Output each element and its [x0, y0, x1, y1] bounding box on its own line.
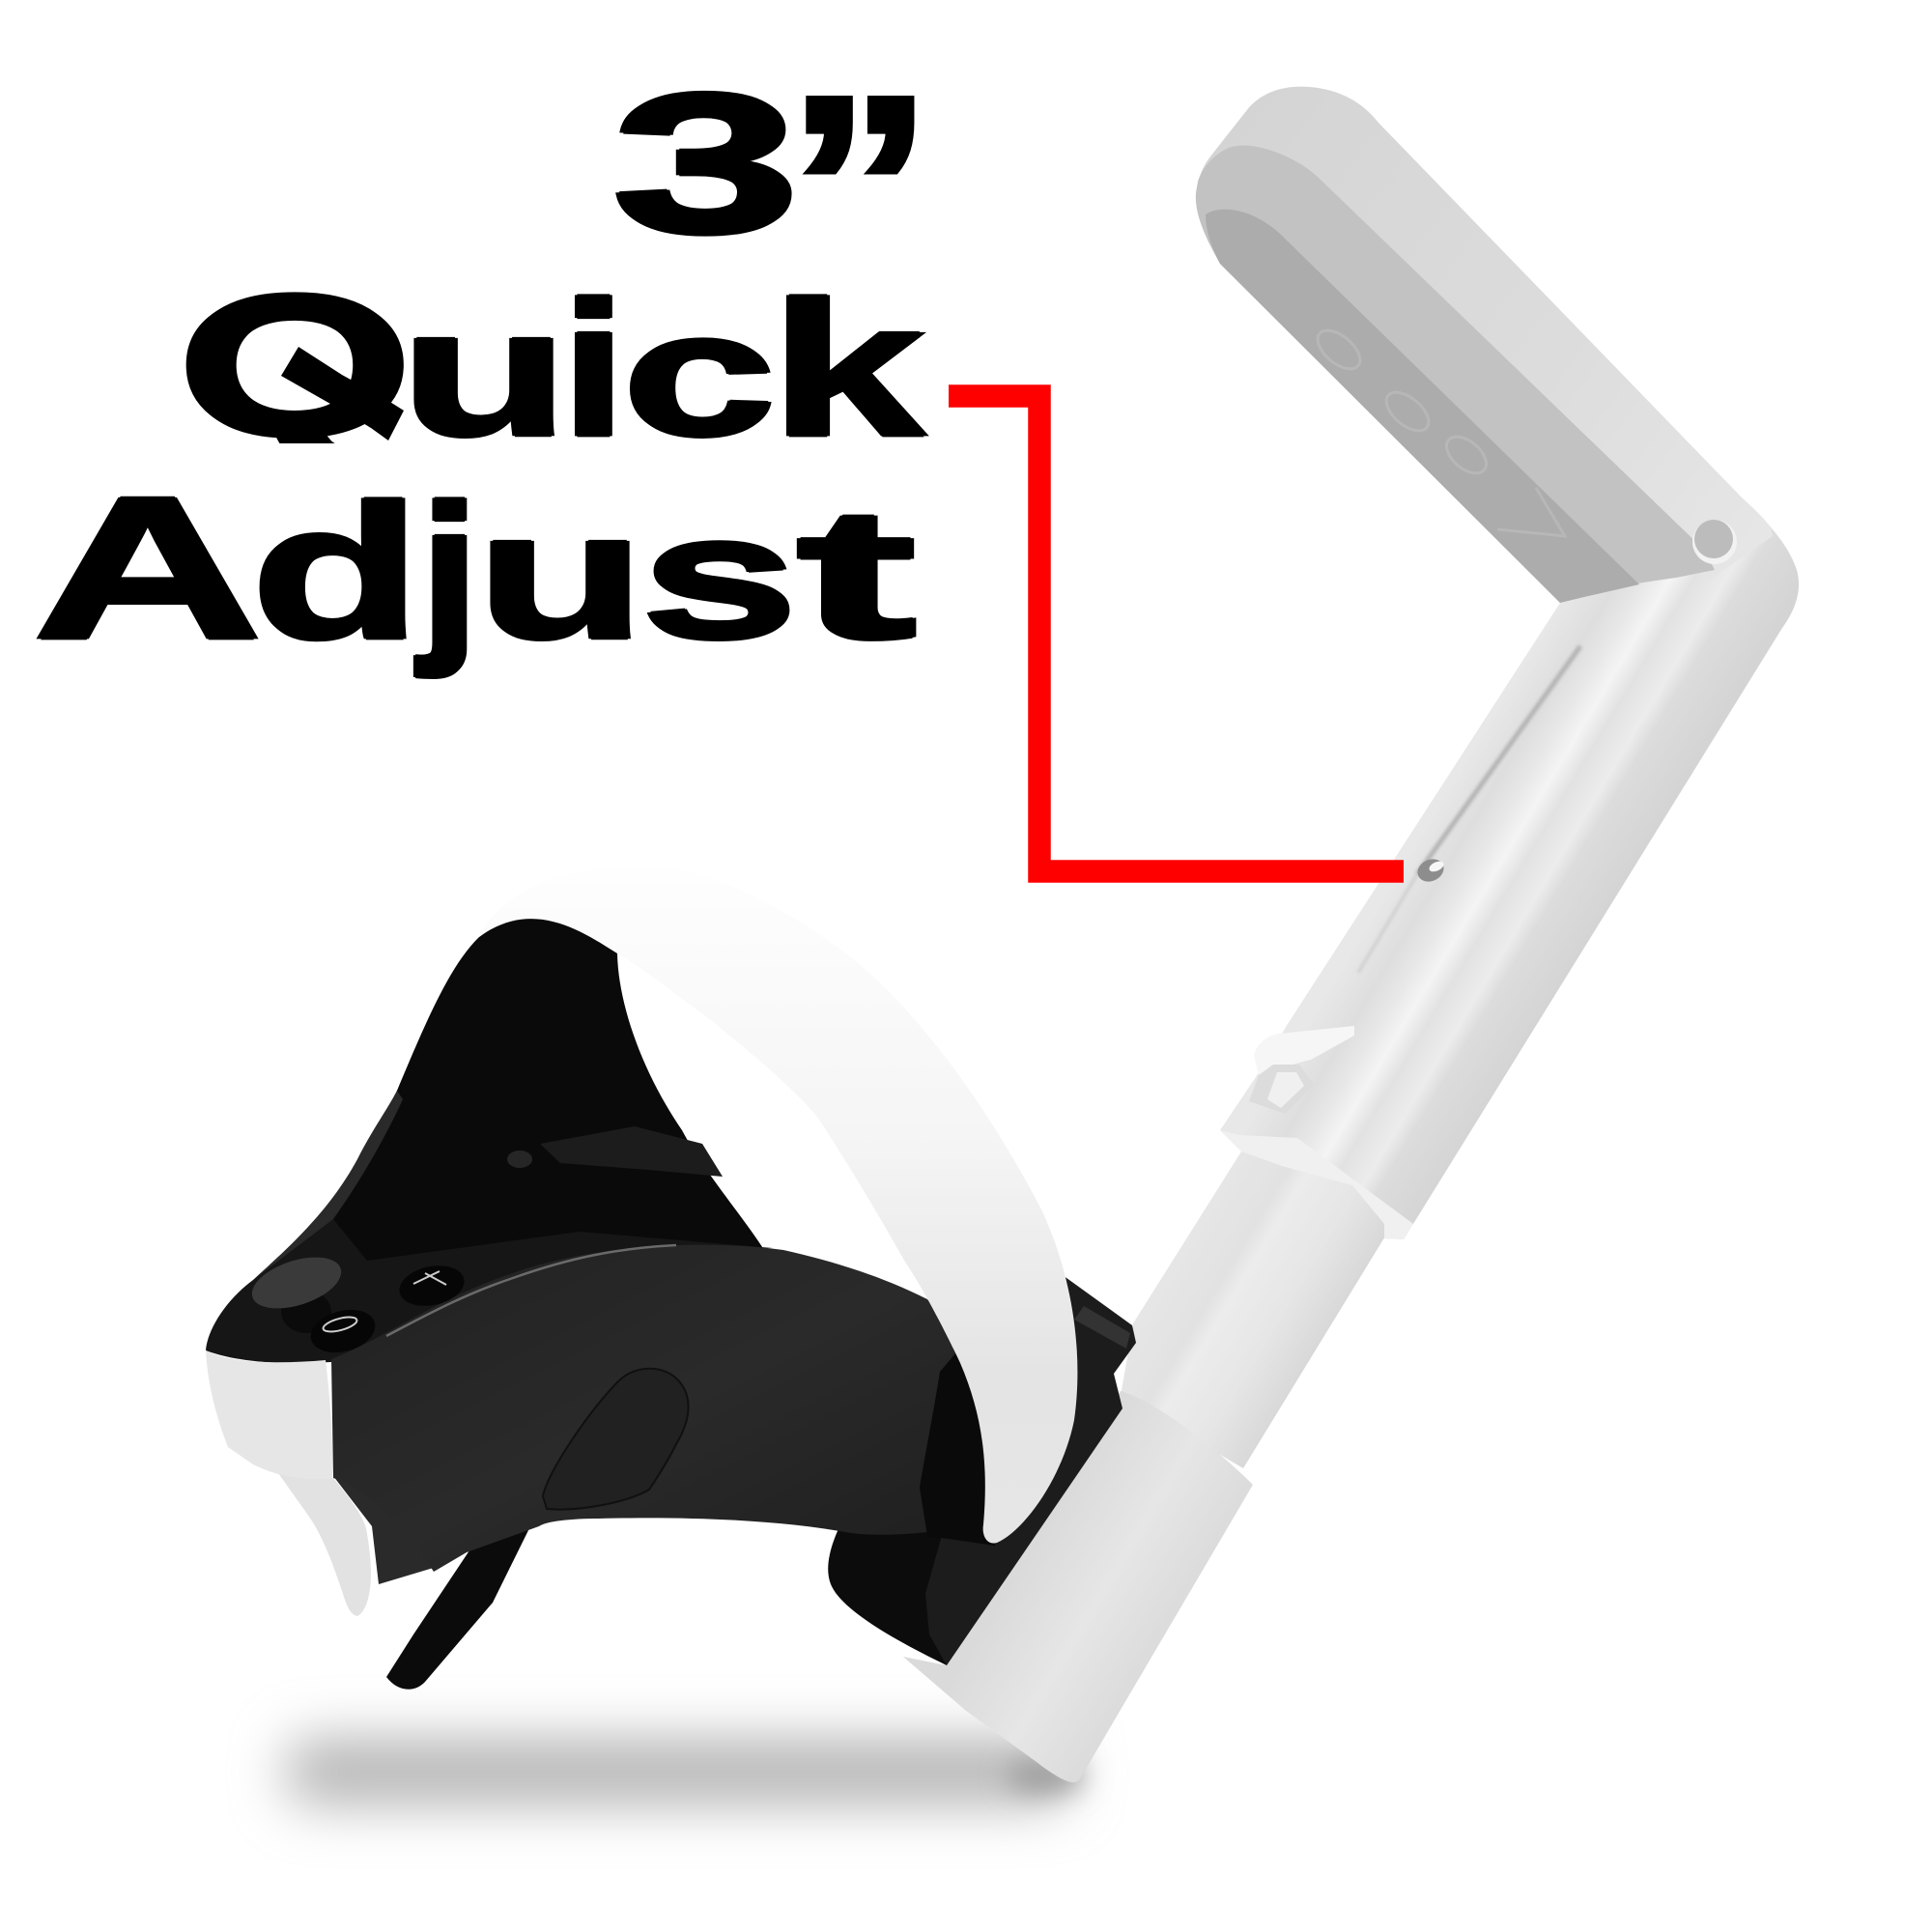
grip hump — [290, 913, 768, 1304]
arm: pivot pin — [1692, 520, 1737, 564]
black mount — [925, 1275, 1136, 1665]
heading: 3" Quick Adjust — [33, 43, 933, 681]
ground shadow — [286, 1739, 1084, 1804]
arm: mid band — [1196, 146, 1715, 603]
white trigger fang — [278, 1473, 371, 1616]
arm: light outer rim — [1196, 87, 1773, 580]
strap — [386, 1520, 533, 1690]
hanger sleeve and elbow — [1220, 498, 1799, 1239]
hanger lower rod — [1121, 1101, 1430, 1468]
dark wedge behind trigger — [333, 1468, 454, 1584]
thumbstick — [245, 1247, 348, 1333]
heading line: Adjust: A — [33, 457, 263, 681]
heading line: Quick: i — [560, 264, 627, 475]
callout leader line — [949, 396, 1404, 871]
heading line: Adjust: d — [251, 467, 422, 678]
heading line: Quick — [177, 255, 929, 477]
hanger top arm — [1196, 87, 1773, 603]
hanger flange — [1220, 1130, 1413, 1239]
inner pad — [828, 1507, 985, 1665]
heading line: Quick: u — [399, 273, 570, 473]
heading line: Quick: k — [770, 264, 923, 475]
crease near ring — [920, 1352, 995, 1546]
strap plug — [507, 1151, 532, 1168]
heading line: 3": 3 — [611, 54, 801, 274]
hanger: adjustable wall mount arm — [903, 87, 1799, 1782]
heading line: Adjust: u — [475, 476, 646, 676]
button O — [306, 1303, 380, 1359]
top control face — [206, 1219, 773, 1363]
mount block — [903, 1391, 1253, 1782]
grip band — [331, 1245, 983, 1572]
white ring — [479, 866, 1077, 1544]
heading line: Adjust — [33, 457, 917, 681]
hump strap loop — [540, 1126, 723, 1177]
heading line: Quick: c — [622, 276, 777, 472]
slot groove lower part — [1358, 874, 1417, 973]
badge capsule — [543, 1369, 689, 1510]
heading line: Quick: Q — [177, 255, 413, 477]
heading line: Adjust: t — [796, 471, 917, 677]
Q diagonal tail — [281, 347, 404, 440]
band highlight edge — [386, 1245, 676, 1336]
button X — [396, 1260, 468, 1312]
heading line: 3": ” — [786, 43, 933, 335]
white end cap — [206, 1350, 332, 1479]
VR controller — [206, 866, 1136, 1690]
slot groove — [1417, 646, 1580, 874]
stud on mount — [1074, 1306, 1130, 1349]
arm: engraved logo marks — [1311, 324, 1565, 536]
locking clip — [1249, 1026, 1354, 1114]
grip hump left rim — [253, 1091, 403, 1280]
heading line: Adjust: s — [640, 479, 799, 675]
heading line: 3" — [611, 43, 933, 439]
Q tail mask — [180, 443, 412, 492]
arm: dark recessed face — [1206, 210, 1639, 603]
adjustment pin — [1414, 855, 1447, 886]
heading line: Adjust: j — [419, 467, 480, 678]
